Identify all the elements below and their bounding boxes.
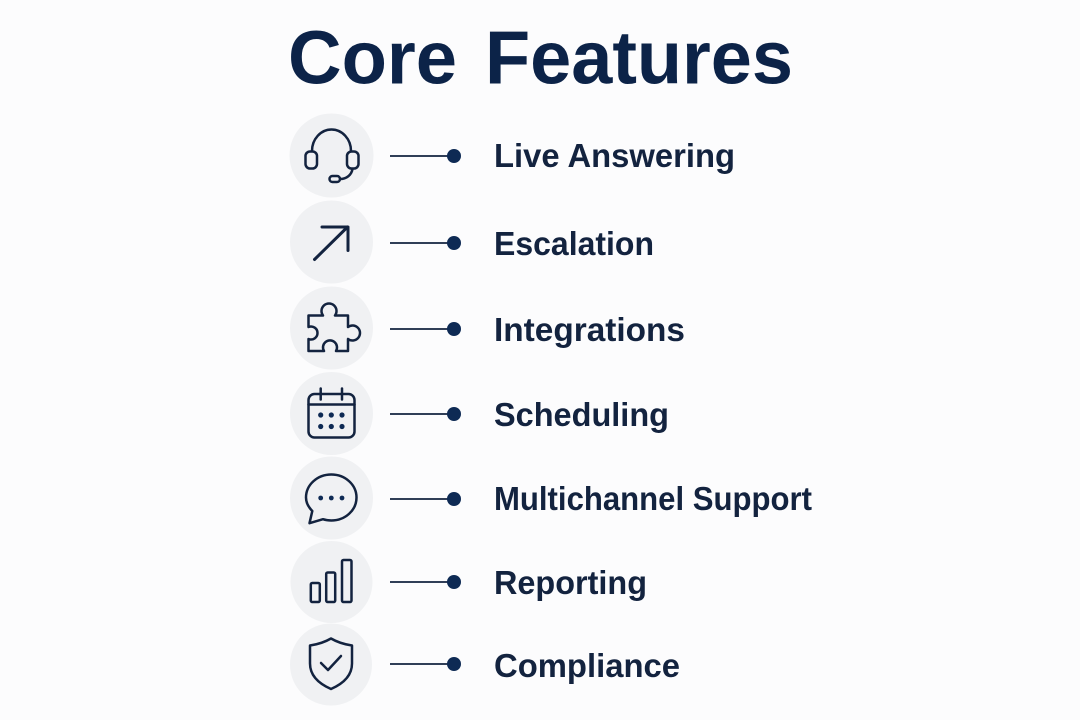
- feature: Live Answering: [290, 114, 735, 198]
- feature: Multichannel Support: [290, 456, 812, 540]
- icon: headset: [306, 130, 358, 182]
- icon: chat bubble: [306, 474, 356, 523]
- icon: puzzle piece: [308, 304, 360, 351]
- feature: Compliance: [290, 624, 680, 706]
- feature: Escalation: [290, 200, 654, 284]
- feature: Integrations: [290, 286, 685, 370]
- feature: Escalation: Escalation: [494, 225, 654, 262]
- feature: Live Answering: Live Answering: [494, 137, 735, 174]
- icon: arrow: [314, 227, 348, 260]
- feature: Multichannel Support: Multichannel Support: [494, 480, 812, 517]
- feature: Integrations: Integrations: [494, 311, 685, 348]
- icon: bar chart: [311, 560, 352, 602]
- title: Core: [288, 16, 457, 100]
- title: Features: [485, 16, 793, 100]
- feature: Scheduling: [290, 372, 669, 455]
- icon: calendar: [308, 388, 354, 438]
- feature: Reporting: Reporting: [494, 564, 647, 601]
- feature: Reporting: [290, 541, 647, 623]
- feature: Compliance: Compliance: [494, 647, 680, 684]
- feature: Scheduling: Scheduling: [494, 396, 669, 433]
- icon: shield check: [310, 638, 352, 689]
